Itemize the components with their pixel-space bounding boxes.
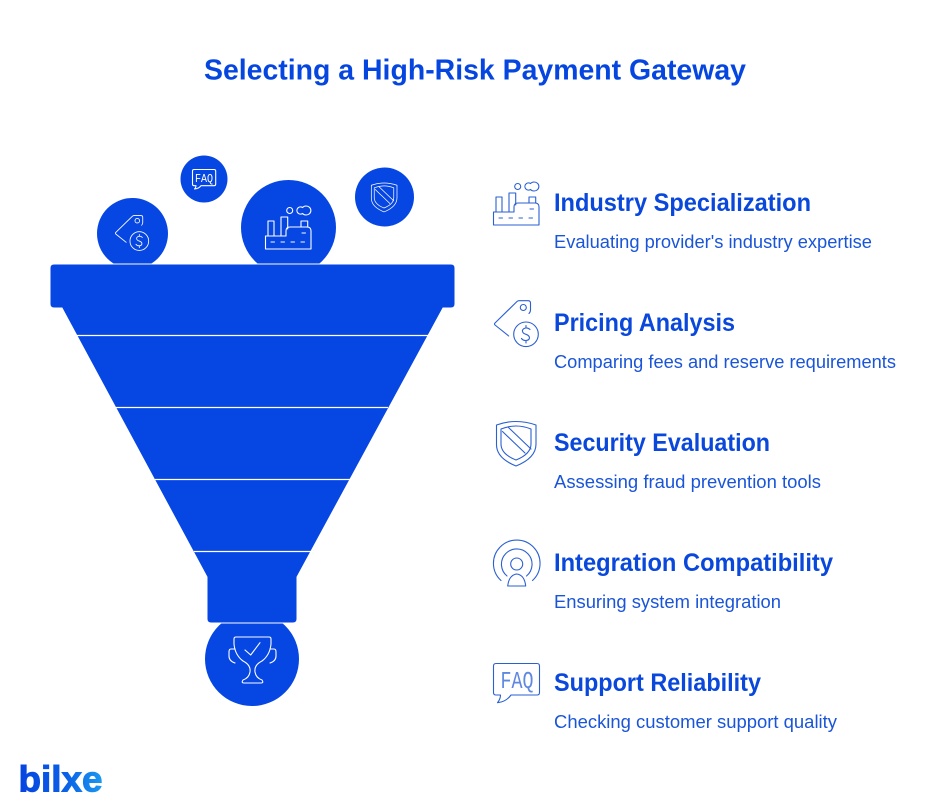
circle: price tag	[97, 198, 168, 269]
title: Selecting a High-Risk Payment Gateway	[204, 54, 746, 86]
circle: FAQ	[180, 156, 228, 202]
item: security evaluation	[496, 422, 821, 492]
item: pricing analysis	[494, 301, 896, 372]
circle: FAQ: FAQ	[195, 172, 213, 186]
item: industry specialization: Evaluating provider's industry expertise	[554, 231, 872, 252]
item: pricing analysis: Pricing Analysis	[554, 310, 735, 337]
item: integration compatibility	[493, 540, 833, 612]
icon: integration signal person	[493, 540, 540, 586]
icon: factory	[494, 182, 539, 225]
item: industry specialization	[494, 182, 872, 252]
item: industry specialization: Industry Specialization	[554, 190, 811, 217]
icon: shield	[496, 422, 536, 466]
item: pricing analysis: Comparing fees and reserve requirements	[554, 351, 896, 372]
logo: bilxe	[18, 758, 102, 800]
circle: factory	[241, 180, 336, 275]
funnel	[50, 264, 455, 623]
icon: price tag	[494, 301, 538, 347]
item: support reliability: Support Reliability	[554, 670, 761, 697]
item: security evaluation: Assessing fraud prevention tools	[554, 471, 821, 492]
icon: FAQ bubble	[494, 664, 540, 703]
circle: trophy	[205, 612, 299, 706]
icon: FAQ bubble: FAQ	[500, 669, 534, 696]
item: integration compatibility: Ensuring system integration	[554, 591, 781, 612]
circle: shield	[355, 168, 414, 226]
item: security evaluation: Security Evaluation	[554, 430, 770, 457]
item: support reliability	[494, 664, 838, 732]
item: integration compatibility: Integration Compatibility	[554, 550, 833, 577]
item: support reliability: Checking customer support quality	[554, 711, 838, 732]
